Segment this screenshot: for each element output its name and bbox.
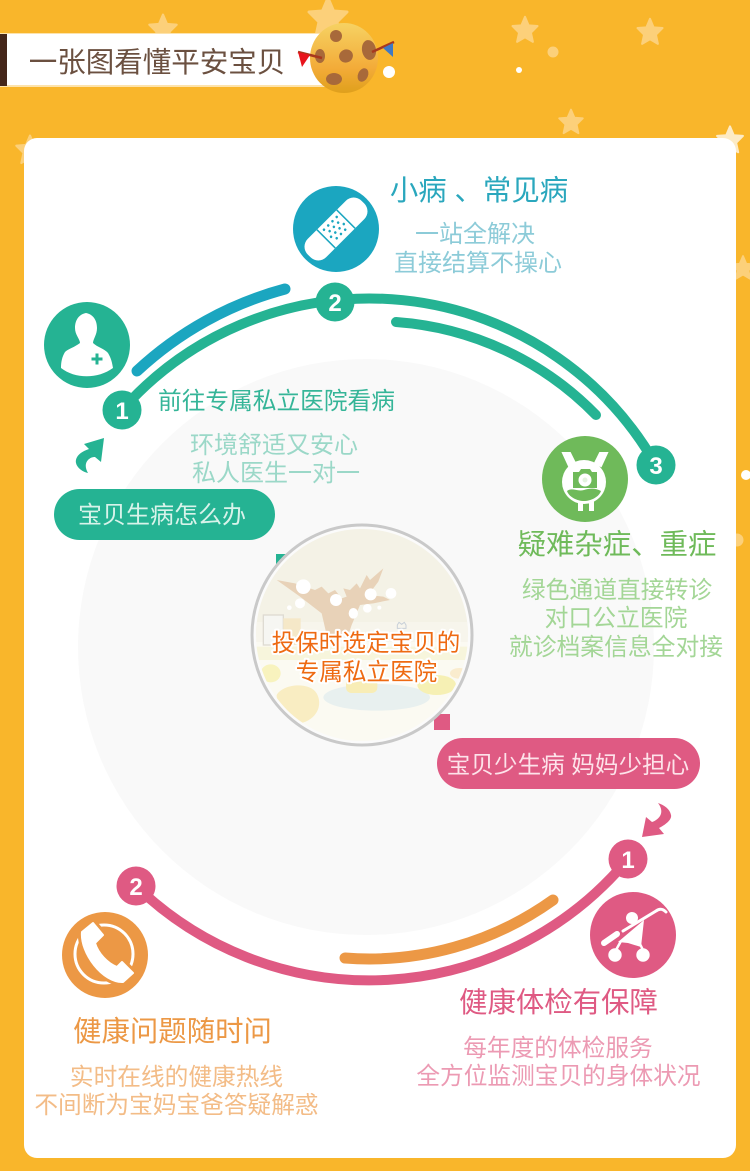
heading: minor illness: 小病 、常见病 (390, 175, 568, 207)
icon: doctor (44, 302, 130, 388)
step marker pink 2 (116, 866, 156, 906)
decorative stars (16, 0, 750, 545)
step marker pink 1: 1 (621, 847, 635, 874)
step marker 3: 3 (649, 453, 663, 480)
text: difficult diseases details (509, 577, 723, 661)
text: private hospital details (190, 432, 360, 487)
text: health check details (416, 1035, 701, 1090)
text: difficult diseases details: 就诊档案信息全对接 (509, 634, 723, 661)
text: private hospital details: 私人医生一对一 (192, 460, 360, 487)
center caption: 投保时选定宝贝的 (272, 630, 460, 657)
step marker 3 (636, 446, 676, 484)
text: health questions details (34, 1064, 319, 1119)
step marker pink 1 (608, 840, 648, 878)
icon: stroller (590, 892, 676, 978)
heading: health questions: 健康问题随时问 (73, 1016, 272, 1048)
icon: green eye device (542, 436, 628, 522)
center photo circle (250, 525, 475, 752)
center caption: 专属私立医院 (296, 659, 437, 686)
background circle (78, 359, 654, 935)
orange arc (345, 900, 553, 959)
text: health questions details: 实时在线的健康热线 (70, 1064, 283, 1091)
pill: less illness: 宝贝少生病 妈妈少担心 (447, 752, 689, 779)
icon: cookie with flags (298, 23, 394, 93)
step marker 2: 2 (328, 290, 342, 317)
icon: arrow down left (642, 803, 671, 837)
text: minor illness details: 一站全解决 (415, 221, 535, 248)
pill: what if baby is ill (54, 489, 275, 540)
heading: health check: 健康体检有保障 (459, 987, 658, 1019)
text: health check details: 全方位监测宝贝的身体状况 (416, 1063, 701, 1090)
inner green arc (396, 322, 596, 415)
green arc (122, 298, 656, 465)
pill: what if baby is ill: 宝贝生病怎么办 (78, 502, 246, 529)
pink arc (136, 859, 628, 980)
icon: bandage (293, 186, 379, 272)
text: difficult diseases details: 对口公立医院 (545, 605, 688, 632)
text: difficult diseases details: 绿色通道直接转诊 (522, 577, 712, 604)
text: minor illness details (394, 221, 562, 277)
blue arc (137, 289, 285, 371)
text: health questions details: 不间断为宝妈宝爸答疑解惑 (34, 1092, 319, 1119)
heading: private hospital: 前往专属私立医院看病 (158, 388, 395, 415)
text: private hospital details: 环境舒适又安心 (190, 432, 358, 459)
step marker 1: 1 (115, 398, 129, 425)
icon: arrow up right (76, 438, 104, 473)
heading: difficult diseases: 疑难杂症、重症 (518, 529, 716, 561)
accent squares (276, 554, 292, 570)
step marker pink 2: 2 (129, 874, 143, 901)
step marker 2 (316, 282, 354, 322)
title banner (0, 33, 330, 87)
center caption (272, 630, 460, 686)
pill: less illness (437, 738, 700, 789)
text: minor illness details: 直接结算不操心 (394, 250, 562, 277)
icon: telephone (62, 912, 148, 998)
text: health check details: 每年度的体检服务 (463, 1035, 653, 1062)
step marker 1 (102, 390, 142, 430)
title text: 一张图看懂平安宝贝 (29, 47, 285, 79)
